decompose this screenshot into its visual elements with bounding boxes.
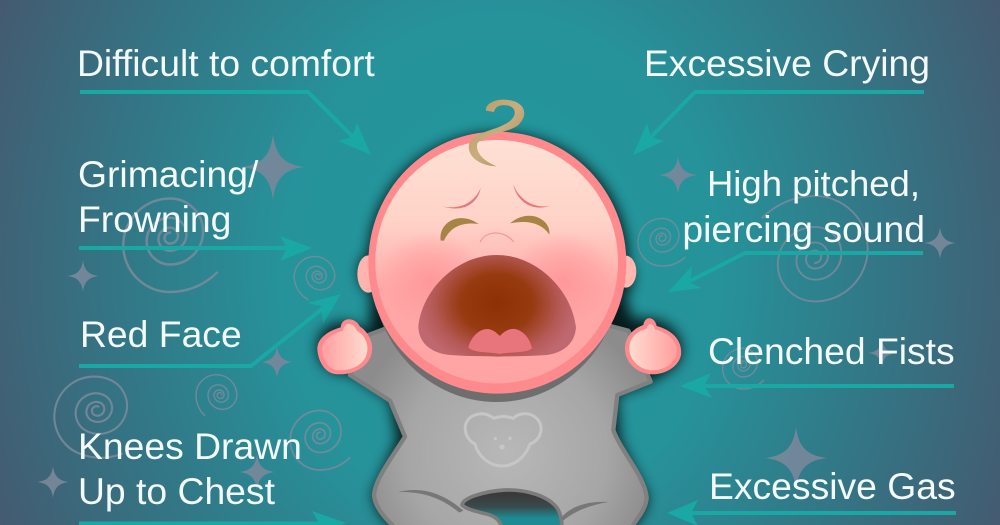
label: clenched fists: Clenched Fists [708,330,955,372]
arrow: difficult to comfort [80,92,371,155]
tongue [468,329,532,354]
arrow: grimacing [79,236,312,261]
arrow: excessive gas [667,500,956,525]
romper suit [350,323,651,525]
right eyebrow [513,185,551,208]
head [368,132,626,394]
label: difficult to comfort: Difficult to comfort [77,42,375,84]
neck shadow [372,138,622,402]
label: grimacing frowning: Frowning [78,198,231,240]
left eye [440,218,479,241]
label: red face: Red Face [80,313,242,355]
label: grimacing frowning [78,153,259,240]
left eyebrow [441,188,481,209]
right eye [510,216,550,235]
arrow: clenched fists [680,373,954,398]
label: knees drawn up to chest [78,425,302,512]
label: high pitched piercing sound [682,163,925,250]
arrow: knees drawn up [79,511,346,525]
mouth [418,255,576,357]
label: knees drawn up to chest: Knees Drawn [78,425,302,467]
label: high pitched piercing sound: High pitched, [707,163,920,204]
cheek blush [373,232,487,332]
arrow: excessive crying [633,92,924,155]
label: excessive crying: Excessive Crying [644,42,930,84]
hair curl [469,100,524,166]
arrow: high pitched [668,253,923,292]
bear logo [465,414,541,466]
label: high pitched piercing sound: piercing sound [682,208,925,250]
leg gap [462,490,562,525]
arrow: red face [79,294,341,366]
hands [317,318,681,374]
nose [480,233,514,242]
baby illustration [317,100,682,525]
decorative spirals [42,196,868,470]
leg creases [398,490,463,513]
label: knees drawn up to chest: Up to Chest [78,470,276,512]
label: excessive gas: Excessive Gas [709,465,956,507]
label: grimacing frowning: Grimacing/ [78,153,259,195]
ears [357,255,636,293]
decorative stars [37,134,956,498]
